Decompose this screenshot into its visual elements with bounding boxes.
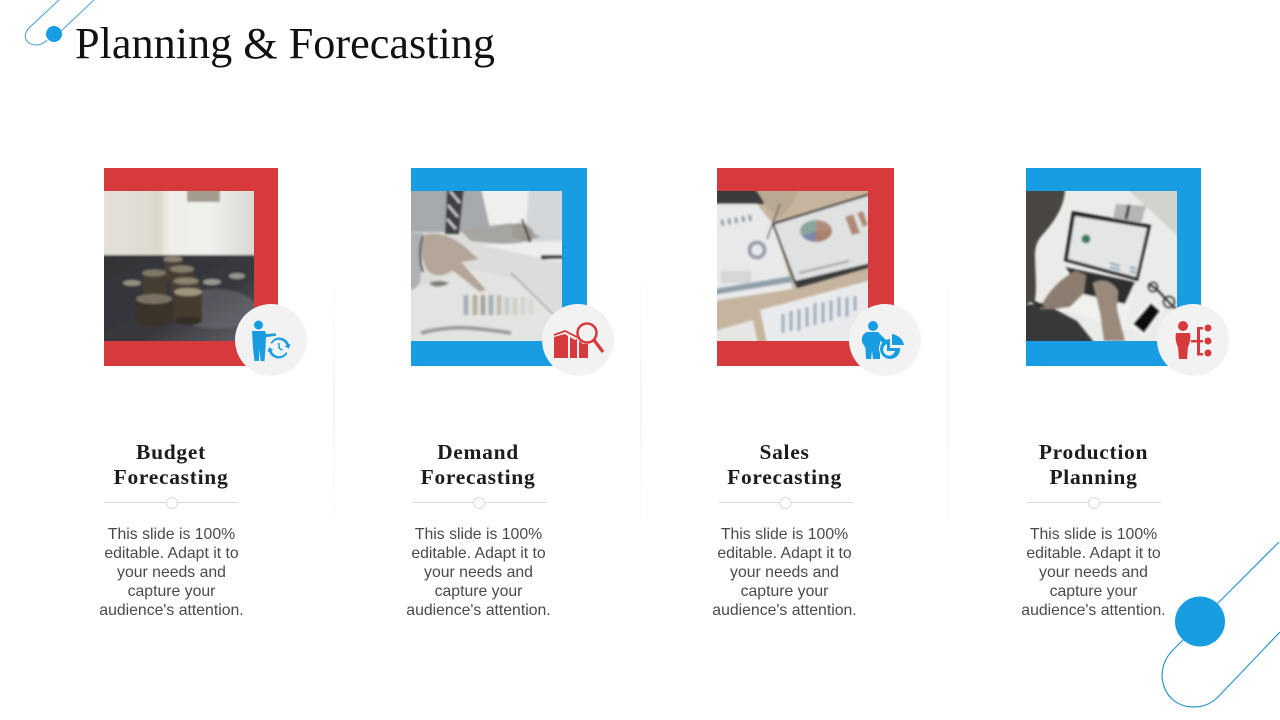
photo: tablet and charts on desk bbox=[717, 191, 868, 341]
body text: your needs and bbox=[424, 564, 533, 581]
icon: bar chart with magnifier bbox=[554, 324, 603, 358]
body text: capture your bbox=[435, 583, 522, 600]
icon: person with clock and dollar bbox=[252, 320, 291, 361]
photo: coins on table bbox=[104, 191, 254, 341]
photo: hand pointing at chart bbox=[411, 191, 562, 341]
body text: This slide is 100% bbox=[415, 526, 542, 543]
body text: capture your bbox=[741, 583, 828, 600]
icon: person with hierarchy bbox=[1176, 321, 1212, 359]
heading: Production bbox=[1039, 440, 1148, 464]
body text: audience's attention. bbox=[1021, 602, 1166, 619]
image frame: red bbox=[717, 168, 894, 366]
body text: This slide is 100% bbox=[108, 526, 235, 543]
heading: Budget bbox=[136, 440, 206, 464]
image frame: blue bbox=[411, 168, 587, 366]
divider bbox=[1027, 498, 1161, 508]
column dividers bbox=[334, 260, 948, 545]
icon: person with pie chart bbox=[862, 321, 904, 359]
icon badge bbox=[849, 304, 921, 376]
panel: demand forecasting bbox=[406, 168, 614, 619]
heading: Planning bbox=[1049, 465, 1138, 489]
body text: audience's attention. bbox=[406, 602, 551, 619]
heading: Forecasting bbox=[421, 465, 535, 489]
decoration: bottom-right loop bbox=[1162, 542, 1280, 707]
heading: Forecasting bbox=[114, 465, 228, 489]
panel: sales forecasting bbox=[712, 168, 921, 619]
image frame: blue bbox=[1026, 168, 1201, 366]
heading: Forecasting bbox=[727, 465, 842, 489]
body text: This slide is 100% bbox=[721, 526, 848, 543]
icon badge bbox=[542, 304, 614, 376]
heading: Sales bbox=[759, 440, 810, 464]
panel: budget forecasting bbox=[99, 168, 307, 619]
body text: editable. Adapt it to bbox=[104, 545, 239, 562]
divider bbox=[719, 498, 853, 508]
image frame: red bbox=[104, 168, 278, 366]
body text: your needs and bbox=[117, 564, 226, 581]
title: Planning & Forecasting bbox=[75, 19, 495, 68]
body text: capture your bbox=[128, 583, 215, 600]
body text: editable. Adapt it to bbox=[1026, 545, 1161, 562]
icon badge bbox=[235, 304, 307, 376]
divider bbox=[412, 498, 547, 508]
divider bbox=[105, 498, 238, 508]
body text: editable. Adapt it to bbox=[717, 545, 852, 562]
decoration: top-left loop bbox=[25, 0, 95, 45]
body text: audience's attention. bbox=[712, 602, 857, 619]
panel: production planning bbox=[1021, 168, 1229, 619]
body text: editable. Adapt it to bbox=[411, 545, 546, 562]
heading: Demand bbox=[437, 440, 519, 464]
body text: your needs and bbox=[1039, 564, 1148, 581]
body text: your needs and bbox=[730, 564, 839, 581]
icon badge bbox=[1157, 304, 1229, 376]
photo: laptop and phone bbox=[1026, 191, 1177, 341]
body text: audience's attention. bbox=[99, 602, 244, 619]
body text: capture your bbox=[1050, 583, 1137, 600]
body text: This slide is 100% bbox=[1030, 526, 1157, 543]
